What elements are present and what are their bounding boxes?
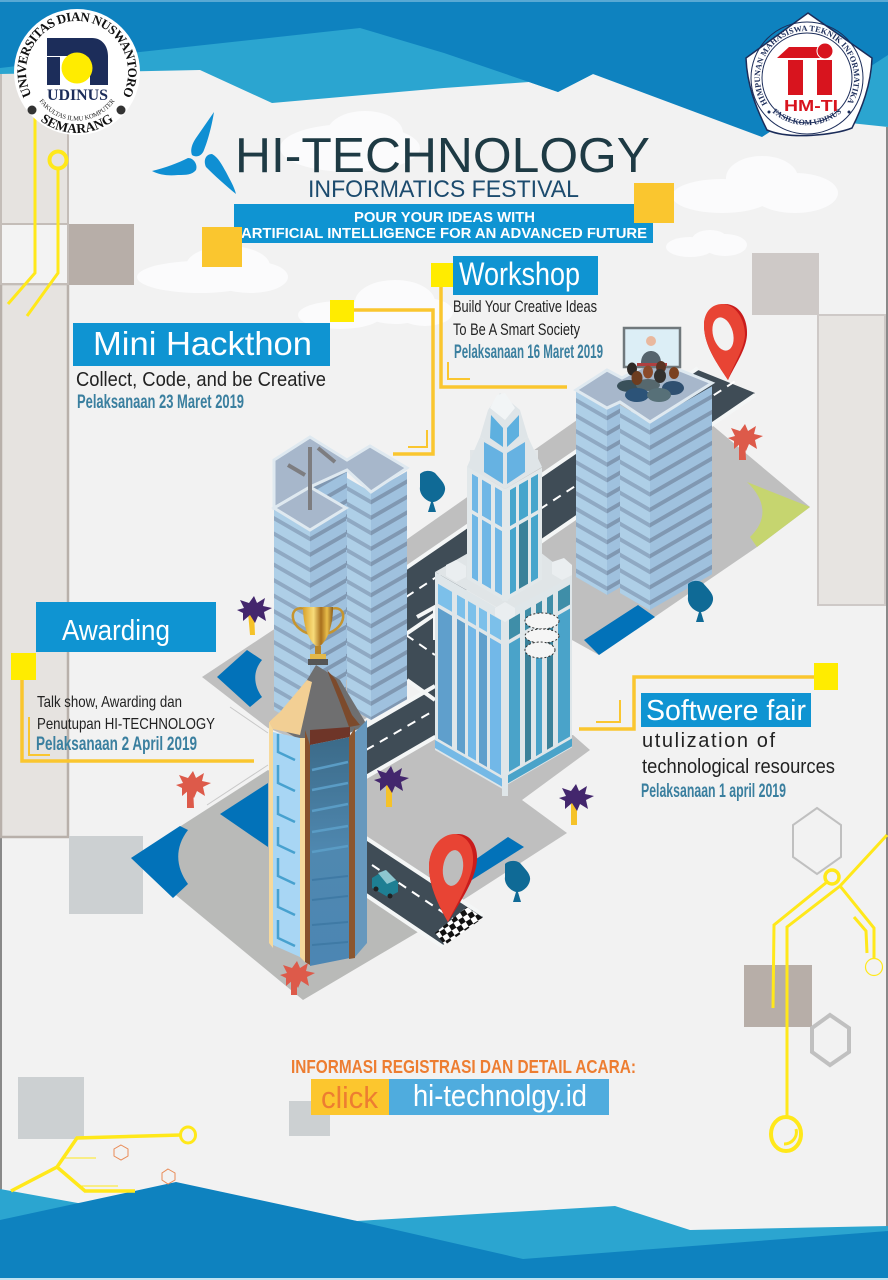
panel: awarding [11,602,254,761]
logo: UDINUS: UNIVERSITAS DIAN NUSWANTORO [17,12,137,98]
circuit lines: top left [8,115,66,316]
panel: left decorative blocks [1,72,143,914]
twin tower [274,437,407,731]
panel: workshop: Build Your Creative Ideas [453,297,597,316]
checkered finish line [435,907,483,945]
panel: mini hackthon: Collect, Code, and be Creative [76,369,326,391]
panel: awarding: Awarding [62,615,170,647]
circuit lines: bottom left [11,1127,196,1191]
blue pools [131,605,655,898]
logo: UDINUS: UDINUS [47,87,108,104]
decor: grey hexagons right [793,808,849,1065]
panel: softwere fair [579,663,838,802]
logo: HM-TI: HM-TI [784,98,838,115]
panel: workshop: Workshop [459,256,580,292]
panel: right decorative blocks [752,253,885,605]
icon: car [372,870,398,898]
panel: mini hackthon: Mini Hackthon [93,325,312,362]
banner: slogan [234,204,653,243]
road curbs [366,368,755,947]
title: HI-TECHNOLOGY [235,129,650,183]
panel: workshop: To Be A Smart Society [453,320,580,339]
panel: softwere fair: Pelaksanaan 1 april 2019 [641,781,786,802]
clouds [137,111,838,329]
palm trees [176,424,763,995]
call to action button: click [321,1080,378,1115]
call to action button [311,1078,609,1115]
central skyscraper [435,393,572,796]
icon: trophy [293,607,343,665]
banner: slogan: ARTIFICIAL INTELLIGENCE FOR AN ADVANCED FUTURE [241,226,647,242]
panel: softwere fair: Softwere fair [646,695,806,727]
call to action button: hi-technolgy.id [413,1078,587,1113]
panel: mini hackthon: Pelaksanaan 23 Maret 2019 [77,392,244,413]
building with audience [576,328,712,610]
logo: UDINUS: SEMARANG [41,114,112,134]
logo: HM-TI: FASILKOM UDINUS [772,108,841,126]
icon: audience [617,361,684,402]
trophy building [269,665,367,966]
panel: mini hackthon [73,300,433,454]
decor: orange squares [202,183,674,267]
icon: presenter screen [624,328,680,367]
icon: operator logo on tower [525,613,559,658]
logo: HM-TI: HIMPUNAN MAHASISWA TEKNIK INFORMATIKA [754,26,860,106]
circuit lines: right [771,835,887,1151]
banner: slogan: POUR YOUR IDEAS WITH [354,210,535,226]
title: INFORMATICS FESTIVAL [308,176,579,203]
panel: awarding: Pelaksanaan 2 April 2019 [36,734,197,755]
logo: UDINUS: FAKULTAS ILMU KOMPUTER [40,98,115,121]
decor: taupe square right [744,965,812,1027]
ground plates [131,372,810,1000]
isometric city [131,304,810,1000]
roads [366,370,755,945]
icon: map pin bottom [429,834,477,922]
panel: softwere fair: technological resources [642,756,835,778]
logo: HM-TI [745,12,873,136]
call to action heading: INFORMASI REGISTRASI DAN DETAIL ACARA: [291,1057,636,1077]
panel: awarding: Talk show, Awarding dan [37,694,182,711]
decor: grey squares bottom [18,1077,330,1139]
icon: wind turbine [152,112,236,194]
bottom wave banner [0,1182,888,1280]
decor: small hexagons [114,1145,175,1184]
panel: awarding: Penutupan HI-TECHNOLOGY [37,716,215,733]
panel: softwere fair: utulization of [642,730,775,752]
round trees [420,471,713,902]
top wave banner [0,0,888,137]
road dashes [366,378,740,925]
panel: workshop: Pelaksanaan 16 Maret 2019 [454,342,603,363]
green lawn [747,482,810,547]
icon: map pin top [704,304,747,380]
panel: workshop [431,256,603,387]
